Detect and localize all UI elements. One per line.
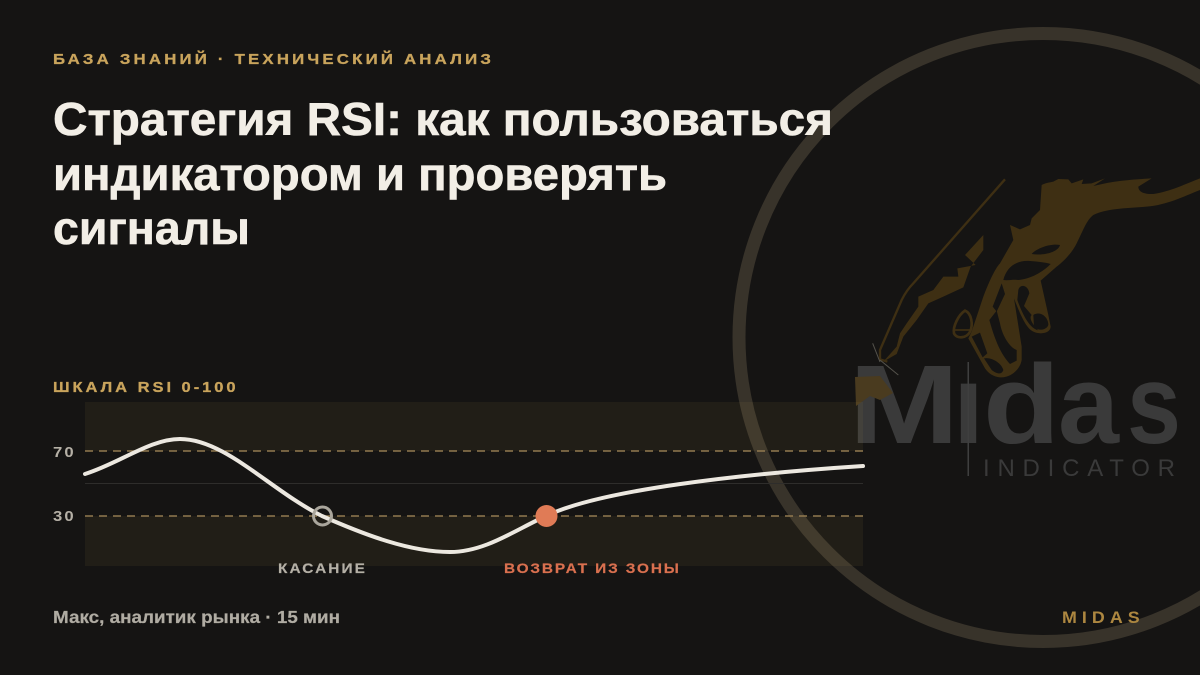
logo wordmark: Midas: a [1058, 342, 1120, 467]
marker: touch [314, 507, 332, 525]
oversold zone [85, 516, 863, 566]
marker: return from zone [536, 505, 558, 527]
RSI curve [85, 439, 863, 552]
logo ring [739, 34, 1200, 642]
logo subtitle: INDICATOR: INDICATOR [983, 455, 1175, 482]
overbought zone [85, 402, 863, 451]
logo wordmark: Midas: d [983, 342, 1060, 467]
logo watermark: ring, hand and Midas wordmark [739, 34, 1200, 642]
chart heading: ШКАЛА RSI 0-100 [53, 380, 236, 396]
label: return from zone: ВОЗВРАТ ИЗ ЗОНЫ [504, 562, 679, 577]
title: сигналы [53, 202, 250, 254]
logo wordmark: Midas: s [1127, 342, 1181, 467]
label: touch: КАСАНИЕ [278, 562, 365, 577]
logo wordmark: Midas: M [849, 342, 959, 467]
axis label 30: 30 [53, 509, 74, 525]
logo wordmark: Midas: i [953, 342, 984, 467]
title [53, 93, 833, 254]
author and reading time: Макс, аналитик рынка · 15 мин [53, 607, 340, 627]
axis label 70: 70 [53, 445, 74, 461]
title: Стратегия RSI: как пользоваться [53, 93, 833, 145]
icon: pointing golden hand [873, 178, 1200, 377]
RSI line chart [53, 402, 863, 577]
brand label: MIDAS [1062, 607, 1140, 627]
title: индикатором и проверять [53, 148, 667, 200]
eyebrow label: БАЗА ЗНАНИЙ · ТЕХНИЧЕСКИЙ АНАЛИЗ [53, 50, 491, 68]
logo wordmark: Midas [849, 342, 1181, 476]
